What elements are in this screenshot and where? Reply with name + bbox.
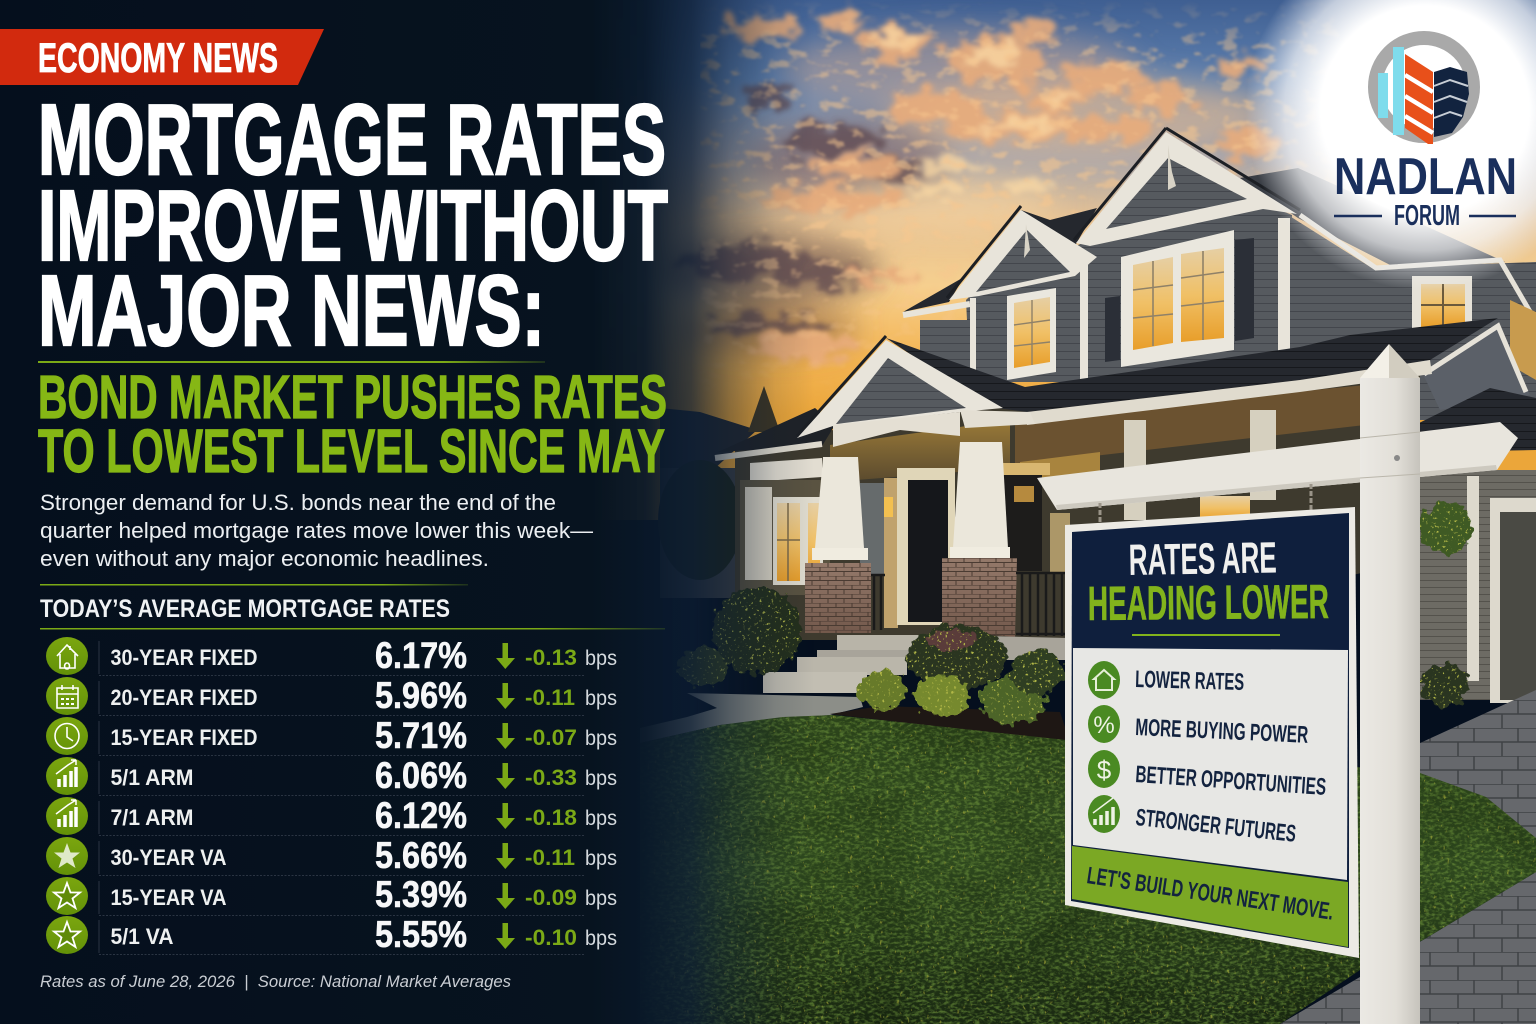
title: IMPROVE WITHOUT <box>38 170 668 282</box>
sign board <box>1065 507 1359 958</box>
row: 5/1 ARM: 6.06% <box>375 755 467 796</box>
subtitle <box>38 363 667 485</box>
title: MORTGAGE RATES <box>38 84 666 196</box>
rates table rule <box>40 628 665 630</box>
grass <box>640 700 1536 1024</box>
front lawn and paths <box>640 690 1536 1024</box>
row: 20-year fixed: 5.96% <box>375 675 467 716</box>
sign item: lower rates: LOWER RATES <box>1135 666 1245 696</box>
icon: calendar <box>46 677 88 715</box>
row: 30-year VA: 5.66% <box>375 835 467 876</box>
row: 30-year fixed: 30-YEAR FIXED <box>110 645 258 670</box>
sign item: better opportunities <box>1088 750 1327 801</box>
logo mark <box>1375 38 1473 144</box>
sign item: stronger futures: STRONGER FUTURES <box>1134 804 1297 848</box>
row: 5/1 VA: 5/1 VA <box>110 924 174 949</box>
row: 7/1 ARM: bps <box>585 807 617 830</box>
sign heading: HEADING LOWER <box>1088 576 1329 631</box>
sign item: better opportunities: BETTER OPPORTUNITIES <box>1135 761 1327 801</box>
mulch bed <box>830 706 1070 742</box>
sign heading: RATES ARE <box>1128 533 1277 585</box>
row: 15-year VA <box>46 874 617 916</box>
row: 5/1 ARM <box>46 755 617 796</box>
clouds: peach masses <box>722 10 1286 360</box>
title <box>38 84 668 367</box>
icon: star <box>46 877 88 915</box>
row: 5/1 VA: -0.10 <box>525 925 577 950</box>
row: 15-year fixed: -0.07 <box>525 725 577 750</box>
sign green footer <box>1072 846 1348 947</box>
house <box>658 128 1536 703</box>
icon: rising chart <box>46 797 88 835</box>
banner: economy news: ECONOMY NEWS <box>38 34 278 81</box>
row: 15-year fixed: 15-YEAR FIXED <box>110 725 258 750</box>
clouds: dark masses <box>680 84 920 337</box>
clouds: soft underglow <box>660 30 1270 352</box>
upper windows <box>992 230 1254 368</box>
right small gable <box>1415 325 1536 452</box>
right wing roof and wall <box>1240 168 1536 420</box>
row: 5/1 ARM: bps <box>585 767 617 790</box>
logo: Nadlan Forum <box>1334 38 1517 232</box>
row: 5/1 VA: bps <box>585 927 617 950</box>
sign item: more buying power: MORE BUYING POWER <box>1135 714 1309 749</box>
icon: star <box>46 837 88 875</box>
row: 30-year fixed: 6.17% <box>375 635 467 676</box>
sign item: stronger futures <box>1088 795 1297 848</box>
row: 30-year VA: -0.11 <box>525 845 575 870</box>
row: 15-year VA: 15-YEAR VA <box>110 885 227 910</box>
row: 30-year fixed: -0.13 <box>525 645 577 670</box>
row: 5/1 VA: 5.55% <box>375 914 467 955</box>
icon: clock <box>46 717 88 755</box>
intro paragraph: quarter helped mortgage rates move lower this week— <box>40 518 593 543</box>
intro paragraph <box>40 490 593 571</box>
title: MAJOR NEWS: <box>38 255 545 367</box>
row: 20-year fixed: -0.11 <box>525 685 575 710</box>
row: 15-year VA: 5.39% <box>375 874 467 915</box>
row: 5/1 ARM: -0.33 <box>525 765 577 790</box>
row: 7/1 ARM: -0.18 <box>525 805 577 830</box>
background photo: sunset sky <box>646 0 1536 520</box>
row: 15-year fixed: 5.71% <box>375 715 467 756</box>
sign chains <box>1100 484 1311 538</box>
lower dormer roof <box>903 208 1097 312</box>
logo glow <box>1245 0 1536 290</box>
doors and lamp <box>860 463 1050 628</box>
logo subtitle: FORUM <box>1394 200 1460 232</box>
sign item: better opportunities: $ <box>1097 755 1112 785</box>
upper main gable <box>1074 128 1300 382</box>
row: 15-year VA: bps <box>585 887 617 910</box>
banner: economy news <box>0 29 324 85</box>
title divider <box>38 361 545 363</box>
pavers <box>1420 690 1536 840</box>
porch railing <box>871 573 1066 636</box>
row: 20-year fixed: 20-YEAR FIXED <box>110 685 258 710</box>
row: 7/1 ARM: 7/1 ARM <box>110 805 194 830</box>
porch gable <box>797 336 1035 447</box>
row: 30-year VA <box>46 835 617 876</box>
sign white panel <box>1073 648 1348 880</box>
sign heading <box>1088 533 1329 636</box>
row: 20-year fixed: bps <box>585 687 617 710</box>
rates table <box>46 635 617 955</box>
row: 5/1 ARM: 5/1 ARM <box>110 765 194 790</box>
neighbour house and tree <box>658 386 780 598</box>
sign item: lower rates <box>1088 661 1245 699</box>
row: 5/1 VA <box>46 914 617 955</box>
row: 30-year VA: bps <box>585 847 617 870</box>
walkway <box>640 693 863 743</box>
porch and lower wall <box>735 360 1536 703</box>
row: 15-year fixed: bps <box>585 727 617 750</box>
paragraph divider <box>40 584 468 586</box>
row: 30-year fixed <box>46 635 617 676</box>
icon: rising chart <box>46 757 88 795</box>
source footnote: Rates as of June 28, 2026 | Source: National Market Averages <box>40 972 511 991</box>
left wing <box>715 408 835 595</box>
front steps <box>763 635 1068 693</box>
sign item: more buying power: % <box>1093 712 1115 739</box>
sign footer text: LET'S BUILD YOUR NEXT MOVE. <box>1085 862 1335 926</box>
row: 15-year VA: -0.09 <box>525 885 577 910</box>
lower dormer gable <box>903 206 1097 382</box>
subtitle: TO LOWEST LEVEL SINCE MAY <box>38 417 665 485</box>
row: 15-year fixed <box>46 715 617 756</box>
shrubs and small tree <box>678 502 1472 725</box>
row: 7/1 ARM <box>46 795 617 836</box>
row: 30-year VA: 30-YEAR VA <box>110 845 227 870</box>
intro paragraph: Stronger demand for U.S. bonds near the end of the <box>40 490 556 515</box>
row: 30-year fixed: bps <box>585 647 617 670</box>
clouds: bright highlights <box>875 31 1079 196</box>
intro paragraph: even without any major economic headlines. <box>40 546 489 571</box>
clouds: small flecks <box>700 4 1330 350</box>
icon: house <box>46 637 88 675</box>
sign item: more buying power <box>1088 705 1309 749</box>
row: 20-year fixed <box>46 675 617 716</box>
rates table heading: TODAY’S AVERAGE MORTGAGE RATES <box>40 595 450 623</box>
columns with stone bases <box>805 442 1017 637</box>
icon: star <box>46 916 88 954</box>
sign post <box>1037 344 1518 1024</box>
lower main roof <box>886 318 1498 425</box>
yard sign <box>1065 484 1359 958</box>
sign navy panel <box>1071 513 1349 948</box>
subtitle: BOND MARKET PUSHES RATES <box>38 363 667 431</box>
row: 7/1 ARM: 6.12% <box>375 795 467 836</box>
